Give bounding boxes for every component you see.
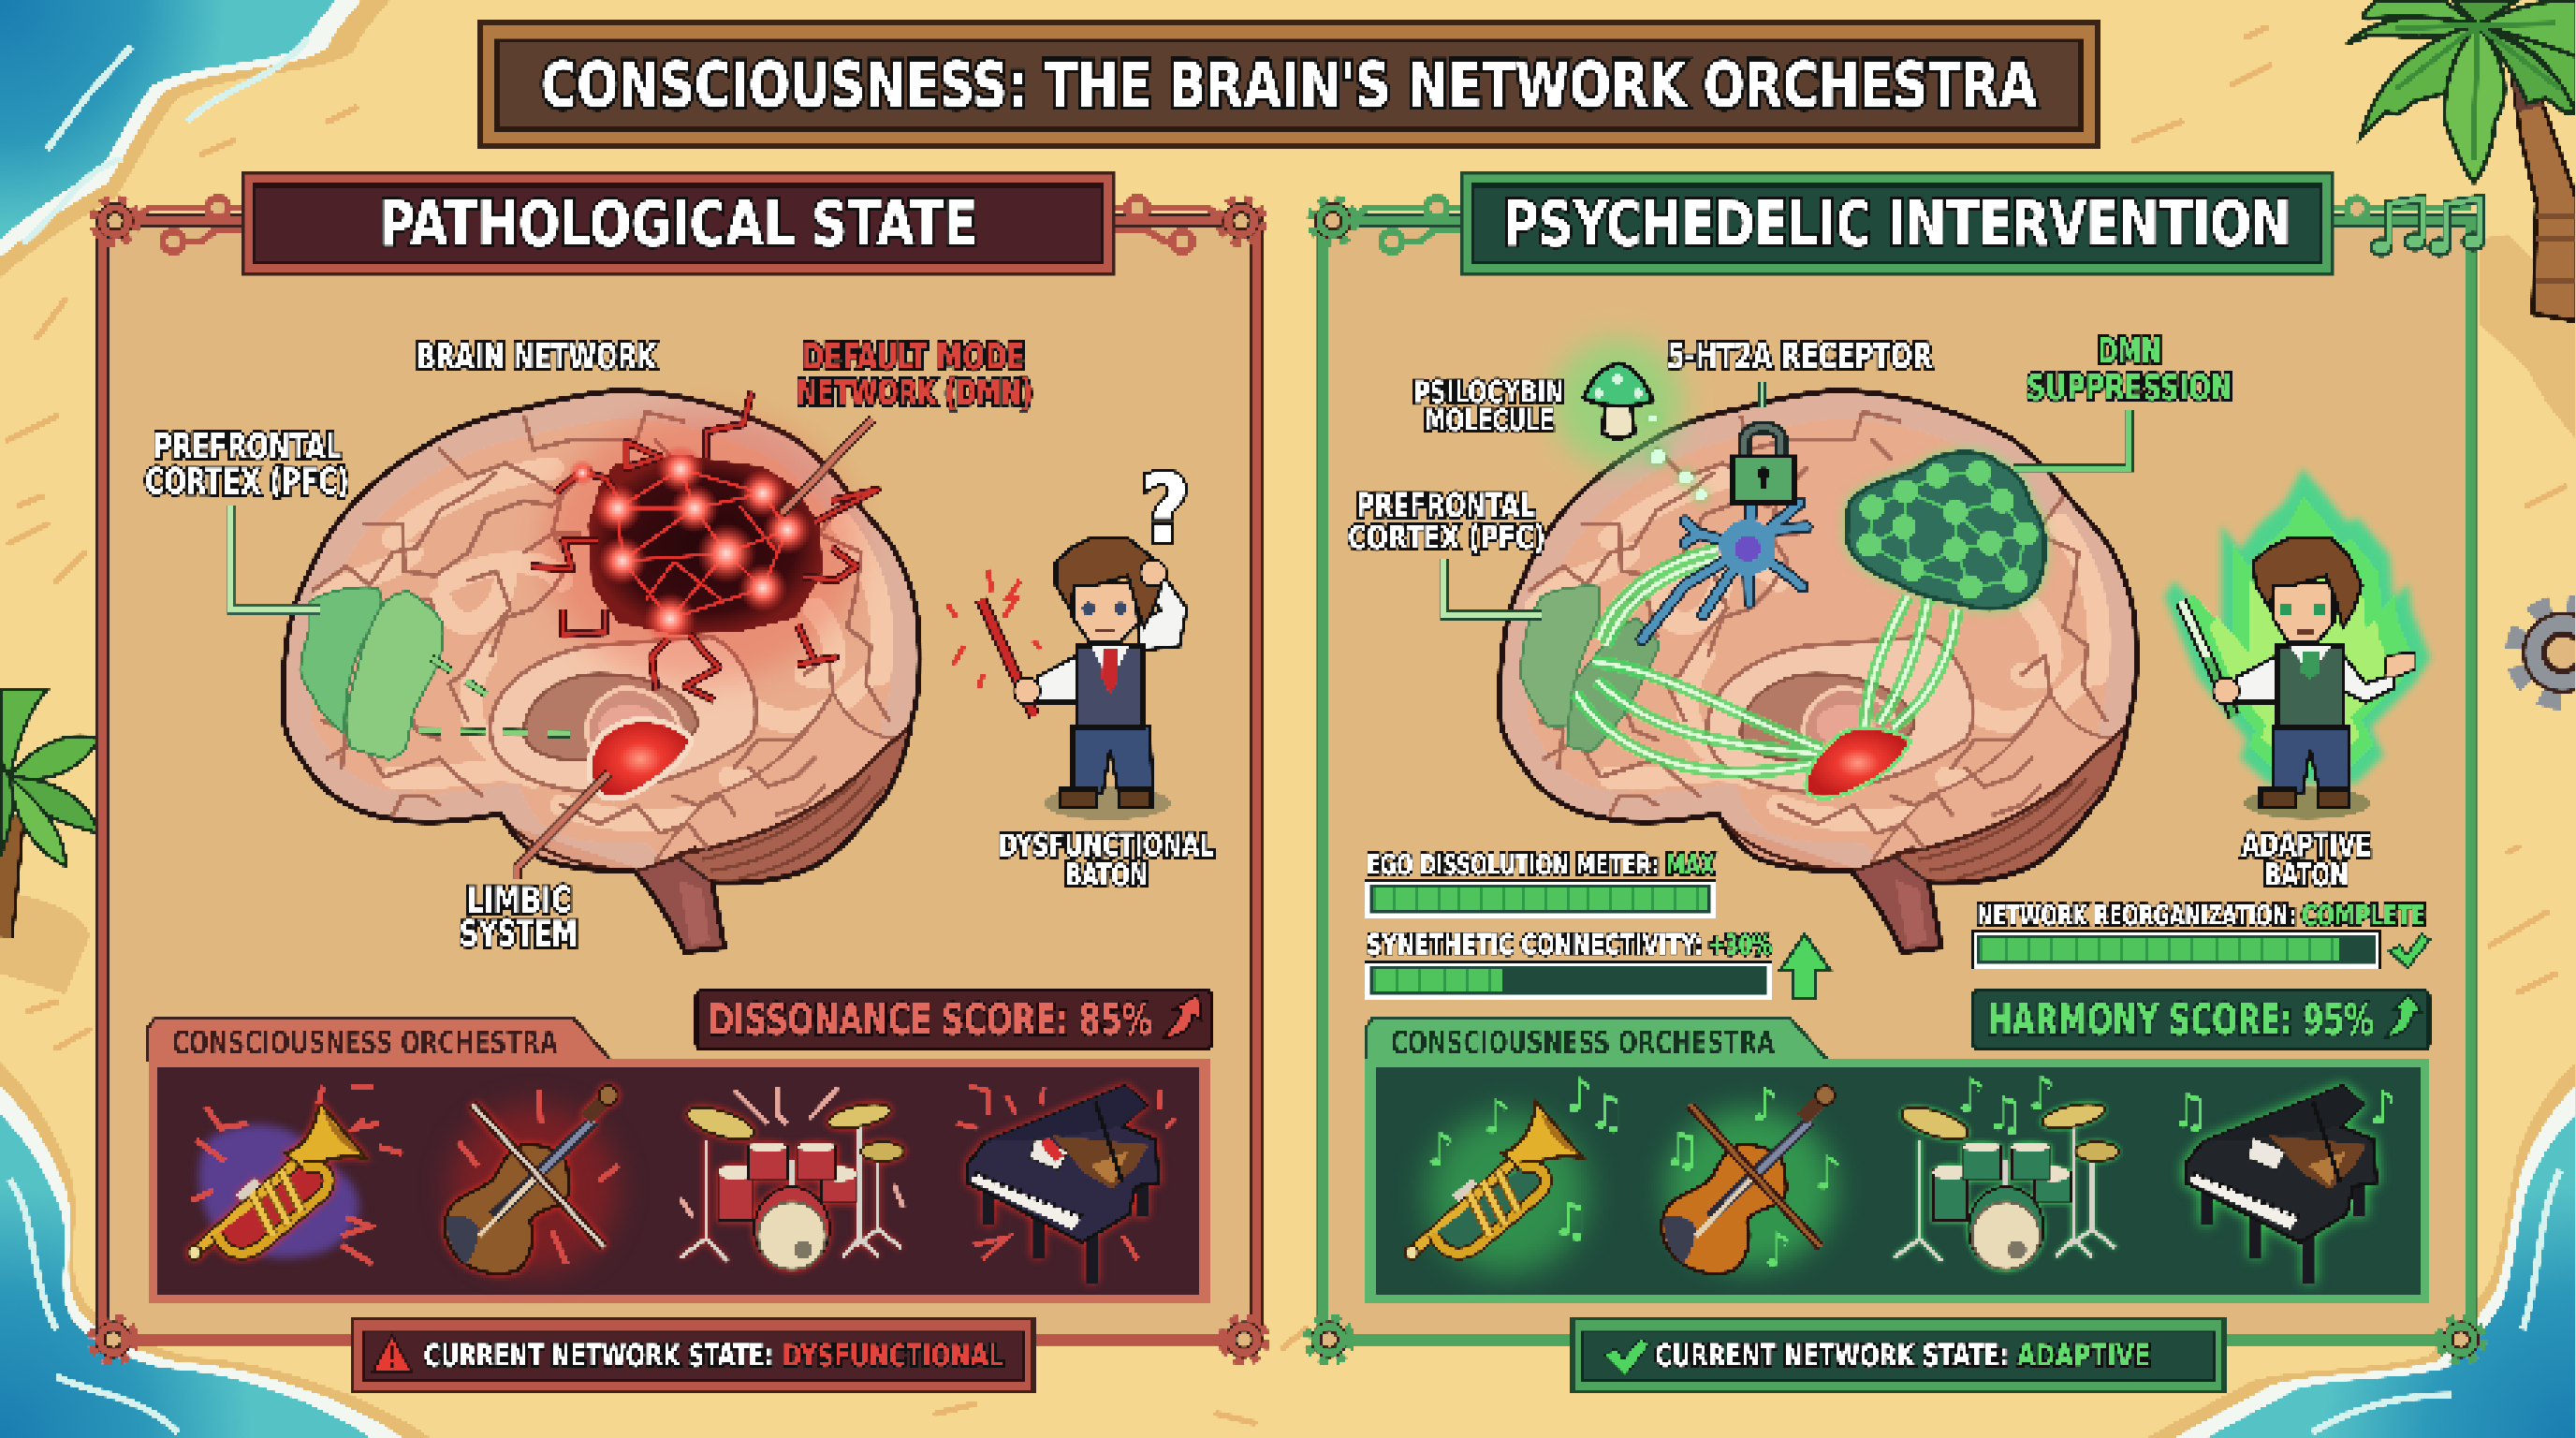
orchestra tab: CONSCIOUSNESS ORCHESTRA — [172, 1024, 558, 1061]
dissonance score: DISSONANCE SCORE: 85% — [709, 995, 1152, 1045]
section header — [243, 173, 1114, 274]
default mode network — [531, 391, 877, 700]
harmony score: HARMONY SCORE: 95% — [1987, 995, 2374, 1045]
icon: check mark — [2390, 934, 2430, 968]
neuron — [1642, 503, 1807, 639]
icon: up arrow — [1164, 994, 1202, 1037]
instrument: violin: ♪ — [1751, 1078, 1778, 1132]
brain — [281, 390, 936, 952]
icon: green up arrow — [1780, 934, 1830, 999]
icon: music notes — [2371, 198, 2483, 256]
limbic system — [1806, 727, 1910, 798]
instrument: grand piano — [2171, 1080, 2396, 1283]
ocean: bottom-right — [2146, 1062, 2576, 1438]
instrument: trumpet — [1405, 1068, 1626, 1273]
current state bar: DYSFUNCTIONAL — [783, 1338, 1003, 1373]
label: prefrontal cortex: CORTEX (PFC) — [145, 462, 349, 502]
label: default mode network: NETWORK (DMN) — [797, 373, 1032, 413]
label: psilocybin molecule: MOLECULE — [1425, 403, 1554, 438]
current state bar — [122, 1318, 1236, 1391]
label: dysfunctional baton: BATON — [1065, 857, 1148, 893]
label: adaptive baton: BATON — [2264, 857, 2349, 893]
instrument: violin — [445, 1086, 618, 1273]
label: psilocybin molecule: PSILOCYBIN — [1413, 374, 1564, 410]
section header — [1462, 173, 2333, 274]
leader lines — [231, 419, 872, 880]
ocean: top-left — [0, 0, 390, 278]
current state bar — [1339, 1318, 2452, 1391]
gears and circuits — [95, 198, 1263, 1358]
meter: network reorganization: COMPLETE — [2302, 900, 2425, 932]
icon: padlock — [1733, 427, 1794, 503]
icon: mushroom — [1552, 339, 1683, 466]
instrument: drum kit — [1895, 1066, 2118, 1269]
icon: warning triangle — [373, 1335, 412, 1372]
orchestra box — [153, 1064, 1205, 1299]
title banner — [480, 23, 2098, 146]
instrument: trumpet — [188, 1086, 402, 1264]
meter: synesthetic connectivity: SYNETHETIC CONNECTIVITY: — [1367, 929, 1703, 961]
instrument: grand piano — [957, 1086, 1175, 1283]
DMN suppressed network — [1847, 452, 2044, 609]
decorative gray gear: right edge — [2522, 611, 2576, 694]
section header: PSYCHEDELIC INTERVENTION — [1503, 188, 2291, 260]
label: 5-HT2A receptor: 5-HT2A RECEPTOR — [1667, 336, 1932, 376]
limbic system — [589, 720, 692, 799]
meter: network reorganization: NETWORK REORGANIZATION: — [1977, 900, 2296, 932]
label: default mode network: DEFAULT MODE — [802, 337, 1025, 377]
instrument: drum kit: ♪ — [1958, 1068, 1984, 1123]
label: limbic system: LIMBIC — [466, 880, 571, 920]
palm tree: top right — [2347, 0, 2576, 440]
instrument: drum kit: ♪ — [2028, 1066, 2055, 1121]
consciousness orchestra panel — [1366, 1018, 2425, 1299]
green aura — [2164, 468, 2431, 784]
instrument: violin: ♫ — [1662, 1123, 1700, 1177]
panel: pathological state — [95, 173, 1263, 1391]
icon: question mark: ? — [1141, 454, 1190, 564]
gears and circuits — [1310, 198, 2480, 1358]
section header: PATHOLOGICAL STATE — [379, 188, 977, 260]
current state bar: CURRENT NETWORK STATE: — [1655, 1338, 2009, 1373]
icon: check mark — [1604, 1339, 1649, 1376]
instrument: trumpet: ♪ — [1427, 1123, 1454, 1177]
instrument: drum kit: ♫ — [1986, 1087, 2024, 1141]
current state bar: CURRENT NETWORK STATE: — [424, 1338, 773, 1373]
instrument: trumpet: ♪ — [1484, 1090, 1510, 1144]
instrument: grand piano: ♪ — [2370, 1080, 2396, 1135]
meter: synesthetic connectivity — [1365, 929, 1772, 1000]
label: adaptive baton: ADAPTIVE — [2242, 827, 2371, 863]
meter: ego dissolution: MAX — [1666, 849, 1715, 881]
consciousness orchestra panel — [148, 1018, 1205, 1299]
green fibre tracts — [1575, 550, 1957, 772]
instrument: trumpet: ♪ — [1566, 1068, 1592, 1123]
meter: synesthetic connectivity: +30% — [1708, 929, 1772, 961]
label: limbic system: SYSTEM — [460, 914, 578, 954]
brain — [1498, 390, 2153, 952]
label: brain network: BRAIN NETWORK — [417, 337, 657, 377]
title banner: CONSCIOUSNESS: THE BRAIN'S NETWORK ORCHESTRA — [541, 49, 2037, 122]
meter: ego dissolution: EGO DISSOLUTION METER: — [1367, 849, 1659, 881]
character: dysfunctional conductor — [947, 538, 1187, 820]
meter: network reorganization — [1973, 900, 2425, 969]
instrument: drum kit — [681, 1086, 904, 1269]
character: adaptive conductor — [2164, 468, 2431, 819]
prefrontal cortex — [1520, 586, 1660, 752]
leader lines — [1444, 381, 2130, 615]
ocean: bottom-left — [0, 1062, 431, 1438]
prefrontal cortex — [300, 587, 572, 759]
palm tree: left edge — [0, 690, 98, 994]
meter: ego dissolution — [1365, 849, 1716, 918]
instrument: grand piano: ♫ — [2171, 1084, 2208, 1138]
label: prefrontal cortex: PREFRONTAL — [154, 427, 342, 467]
instrument: violin: ♪ — [1815, 1146, 1841, 1200]
instrument: trumpet: ♫ — [1552, 1193, 1589, 1247]
panel frame — [1317, 215, 2477, 1345]
label: DMN suppression: DMN — [2098, 331, 2161, 372]
panel frame — [96, 215, 1262, 1345]
label: DMN suppression: SUPPRESSION — [2027, 368, 2232, 408]
orchestra tab: CONSCIOUSNESS ORCHESTRA — [1391, 1024, 1775, 1061]
label: dysfunctional baton: DYSFUNCTIONAL — [999, 827, 1214, 863]
panel: psychedelic intervention — [1310, 173, 2483, 1391]
instrument: violin: ♪ — [1764, 1223, 1791, 1277]
instrument: violin — [1661, 1078, 1841, 1277]
psilocybin particles — [1649, 415, 1706, 501]
label: prefrontal cortex: CORTEX (PFC) — [1348, 520, 1545, 557]
icon: up arrow — [2385, 994, 2422, 1037]
label: prefrontal cortex: PREFRONTAL — [1356, 488, 1535, 525]
instrument: trumpet: ♫ — [1588, 1085, 1626, 1139]
current state bar: ADAPTIVE — [2017, 1338, 2150, 1373]
orchestra box — [1370, 1064, 2425, 1299]
